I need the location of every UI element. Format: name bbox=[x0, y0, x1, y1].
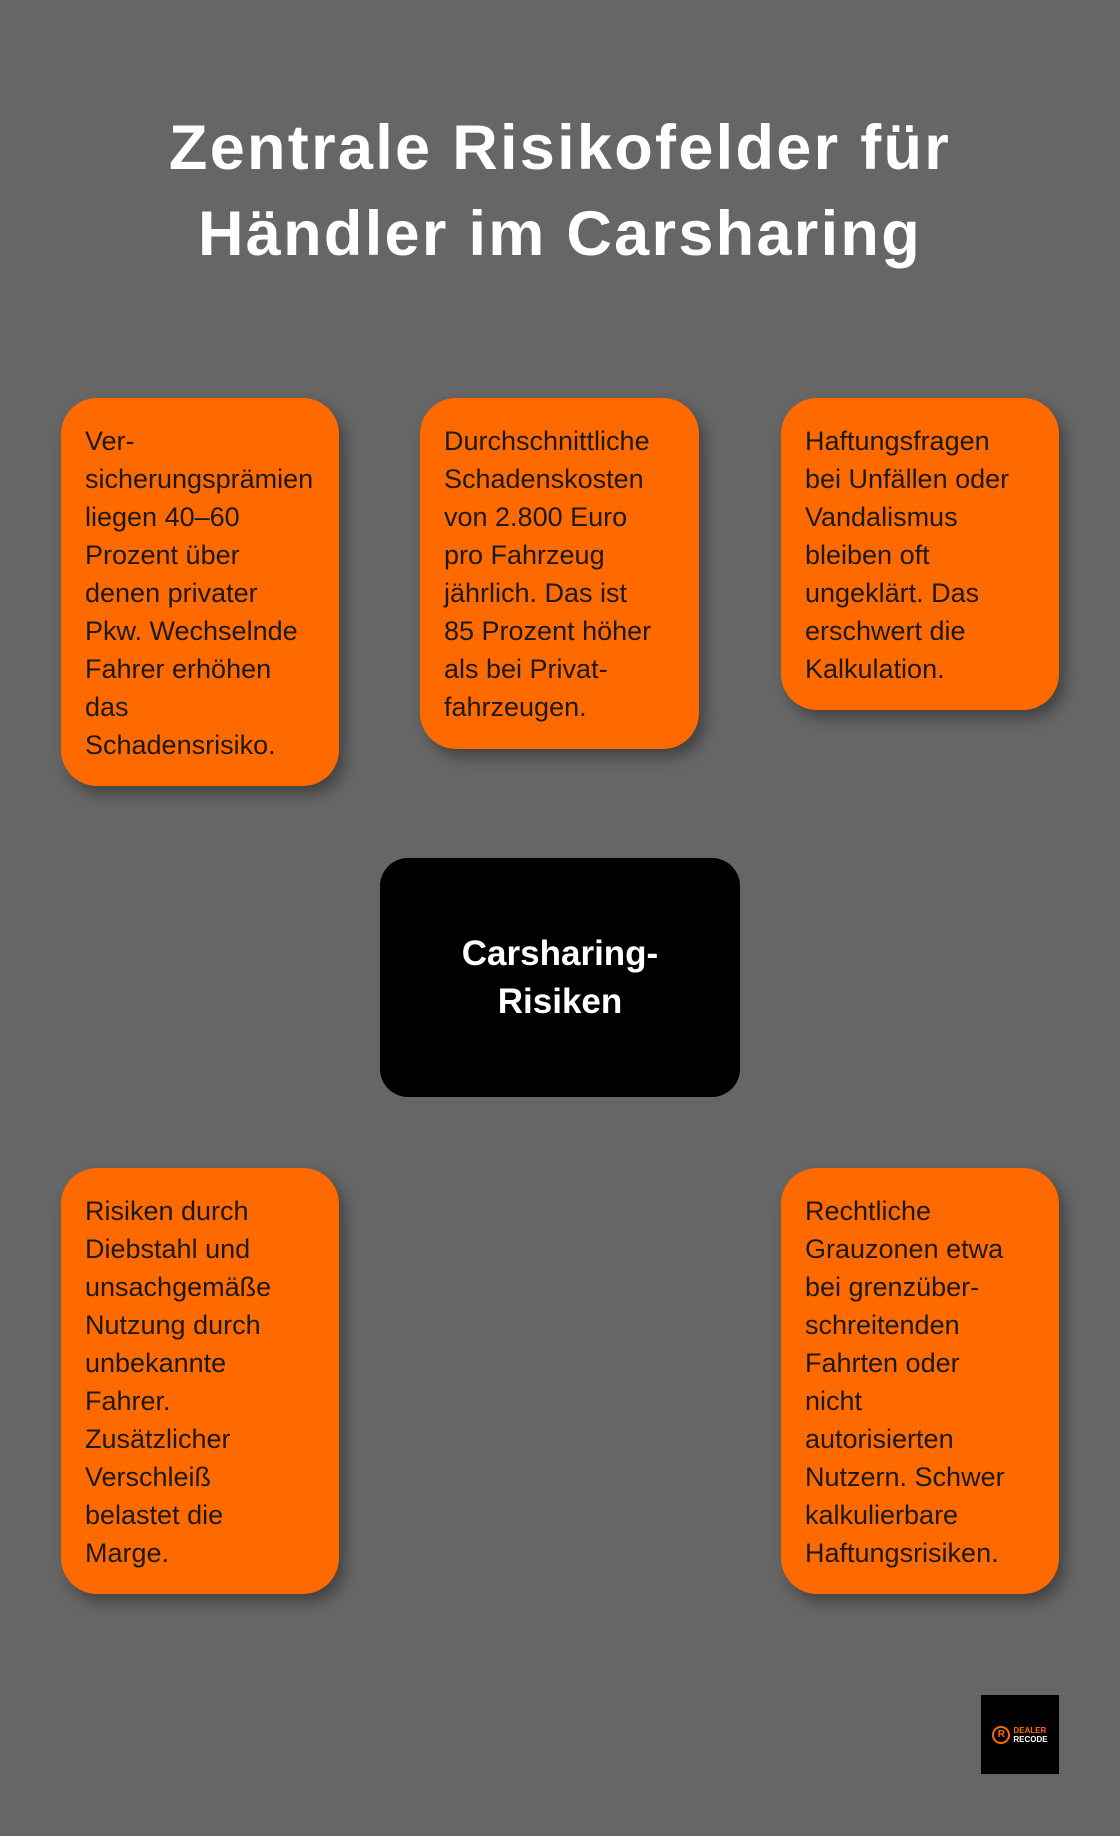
title: Zentrale Risikofelder für bbox=[169, 113, 951, 183]
box: legal grey zones bbox=[781, 1168, 1059, 1594]
box: liability questions: Kalkulation. bbox=[805, 654, 945, 684]
logo: R bbox=[998, 1728, 1005, 1740]
box: theft risks: Verschleiß bbox=[85, 1462, 211, 1492]
box: liability questions: bei Unfällen oder bbox=[805, 464, 1009, 494]
box: insurance premiums: Pkw. Wechselnde bbox=[85, 616, 298, 646]
box: theft risks: Fahrer. bbox=[85, 1386, 171, 1416]
title: Händler im Carsharing bbox=[198, 199, 922, 269]
box: theft risks: Zusätzlicher bbox=[85, 1424, 231, 1454]
box: insurance premiums: Fahrer erhöhen bbox=[85, 654, 271, 684]
box: legal grey zones: schreitenden bbox=[805, 1310, 960, 1340]
box: legal grey zones: Fahrten oder bbox=[805, 1348, 960, 1378]
box: theft risks bbox=[61, 1168, 339, 1594]
box: legal grey zones: Grauzonen etwa bbox=[805, 1234, 1003, 1264]
box: legal grey zones: bei grenzüber- bbox=[805, 1272, 979, 1302]
box: damage costs: pro Fahrzeug bbox=[444, 540, 605, 570]
box: legal grey zones: nicht bbox=[805, 1386, 862, 1416]
box: insurance premiums: sicherungsprämien bbox=[85, 464, 313, 494]
box: damage costs: fahrzeugen. bbox=[444, 692, 587, 722]
box: liability questions: ungeklärt. Das bbox=[805, 578, 979, 608]
box: insurance premiums: denen privater bbox=[85, 578, 258, 608]
box: theft risks: Nutzung durch bbox=[85, 1310, 261, 1340]
box: insurance premiums: das bbox=[85, 692, 129, 722]
box: damage costs: von 2.800 Euro bbox=[444, 502, 627, 532]
box: damage costs: als bei Privat- bbox=[444, 654, 608, 684]
box: insurance premiums bbox=[61, 398, 339, 786]
box: damage costs: Durchschnittliche bbox=[444, 426, 650, 456]
box: insurance premiums: Ver- bbox=[85, 426, 135, 456]
box: liability questions bbox=[781, 398, 1059, 710]
box: liability questions: erschwert die bbox=[805, 616, 966, 646]
logo: DEALER bbox=[1013, 1726, 1046, 1734]
box: legal grey zones: kalkulierbare bbox=[805, 1500, 958, 1530]
box: damage costs bbox=[420, 398, 699, 749]
box: legal grey zones: Rechtliche bbox=[805, 1196, 931, 1226]
box: liability questions: Haftungsfragen bbox=[805, 426, 990, 456]
box: legal grey zones: Nutzern. Schwer bbox=[805, 1462, 1005, 1492]
box: theft risks: Marge. bbox=[85, 1538, 169, 1568]
box: legal grey zones: Haftungsrisiken. bbox=[805, 1538, 999, 1568]
logo: RECODE bbox=[1013, 1734, 1048, 1744]
center node bbox=[380, 858, 740, 1097]
box: liability questions: Vandalismus bbox=[805, 502, 958, 532]
box: insurance premiums: liegen 40–60 bbox=[85, 502, 240, 532]
box: insurance premiums: Prozent über bbox=[85, 540, 240, 570]
center node: Risiken bbox=[498, 982, 622, 1020]
box: damage costs: jährlich. Das ist bbox=[444, 578, 627, 608]
box: theft risks: Diebstahl und bbox=[85, 1234, 250, 1264]
box: damage costs: Schadenskosten bbox=[444, 464, 644, 494]
box: legal grey zones: autorisierten bbox=[805, 1424, 954, 1454]
box: theft risks: unbekannte bbox=[85, 1348, 226, 1378]
logo bbox=[981, 1695, 1059, 1774]
box: theft risks: unsachgemäße bbox=[85, 1272, 271, 1302]
center node: Carsharing- bbox=[462, 934, 658, 972]
box: insurance premiums: Schadensrisiko. bbox=[85, 730, 276, 760]
box: damage costs: 85 Prozent höher bbox=[444, 616, 651, 646]
box: theft risks: belastet die bbox=[85, 1500, 223, 1530]
title bbox=[169, 113, 951, 269]
box: liability questions: bleiben oft bbox=[805, 540, 930, 570]
box: theft risks: Risiken durch bbox=[85, 1196, 249, 1226]
